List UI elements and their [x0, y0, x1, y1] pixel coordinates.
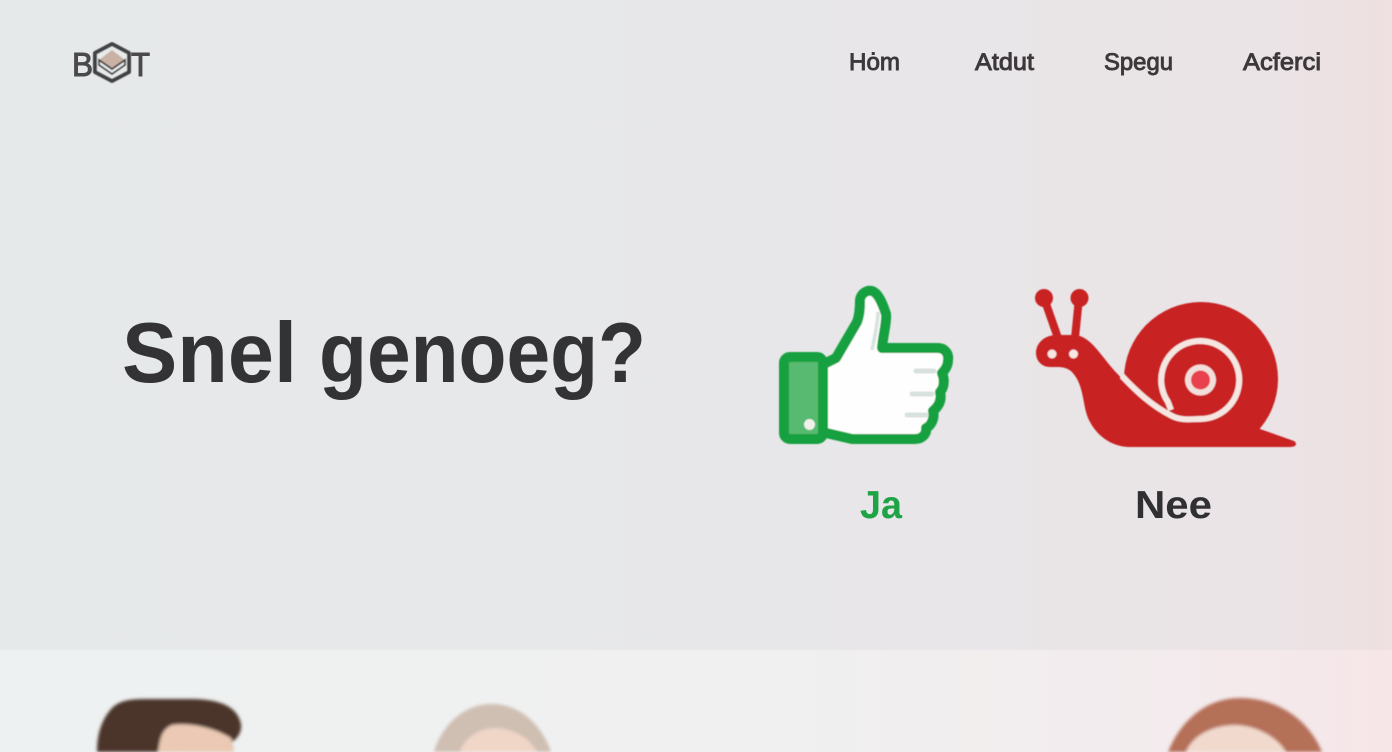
title: Snel — [122, 306, 297, 401]
cuff button — [804, 419, 815, 430]
eyes — [1048, 350, 1056, 358]
shell centre — [1185, 364, 1216, 396]
icon: hexagon box — [95, 44, 129, 81]
icon: green thumbs up — [784, 291, 948, 439]
logo — [72, 44, 150, 83]
nav item: Spegu: Spegu — [1104, 49, 1173, 76]
logo: B — [72, 46, 93, 83]
finger lines — [907, 371, 934, 415]
label: Nee: Nee — [1135, 484, 1212, 527]
antennae — [1044, 298, 1079, 338]
cuff — [784, 357, 823, 439]
photo: red-haired woman — [1168, 698, 1322, 752]
body — [1036, 335, 1296, 447]
label: Ja: Ja — [860, 484, 902, 527]
hand — [822, 291, 948, 439]
logo: T — [131, 46, 150, 83]
nav item: About: Atdut — [975, 49, 1034, 76]
nav item: Hom: Hȯm — [849, 49, 900, 76]
lower photo band — [0, 650, 1392, 752]
icon: red snail — [1035, 289, 1296, 456]
navigation — [849, 49, 1321, 76]
title: genoeg? — [319, 306, 646, 401]
photo: man — [97, 699, 241, 752]
nav item: Acferci: Acferci — [1243, 49, 1321, 76]
shell — [1124, 301, 1279, 430]
shell spiral — [1122, 341, 1239, 419]
photo: blonde woman — [434, 704, 551, 752]
